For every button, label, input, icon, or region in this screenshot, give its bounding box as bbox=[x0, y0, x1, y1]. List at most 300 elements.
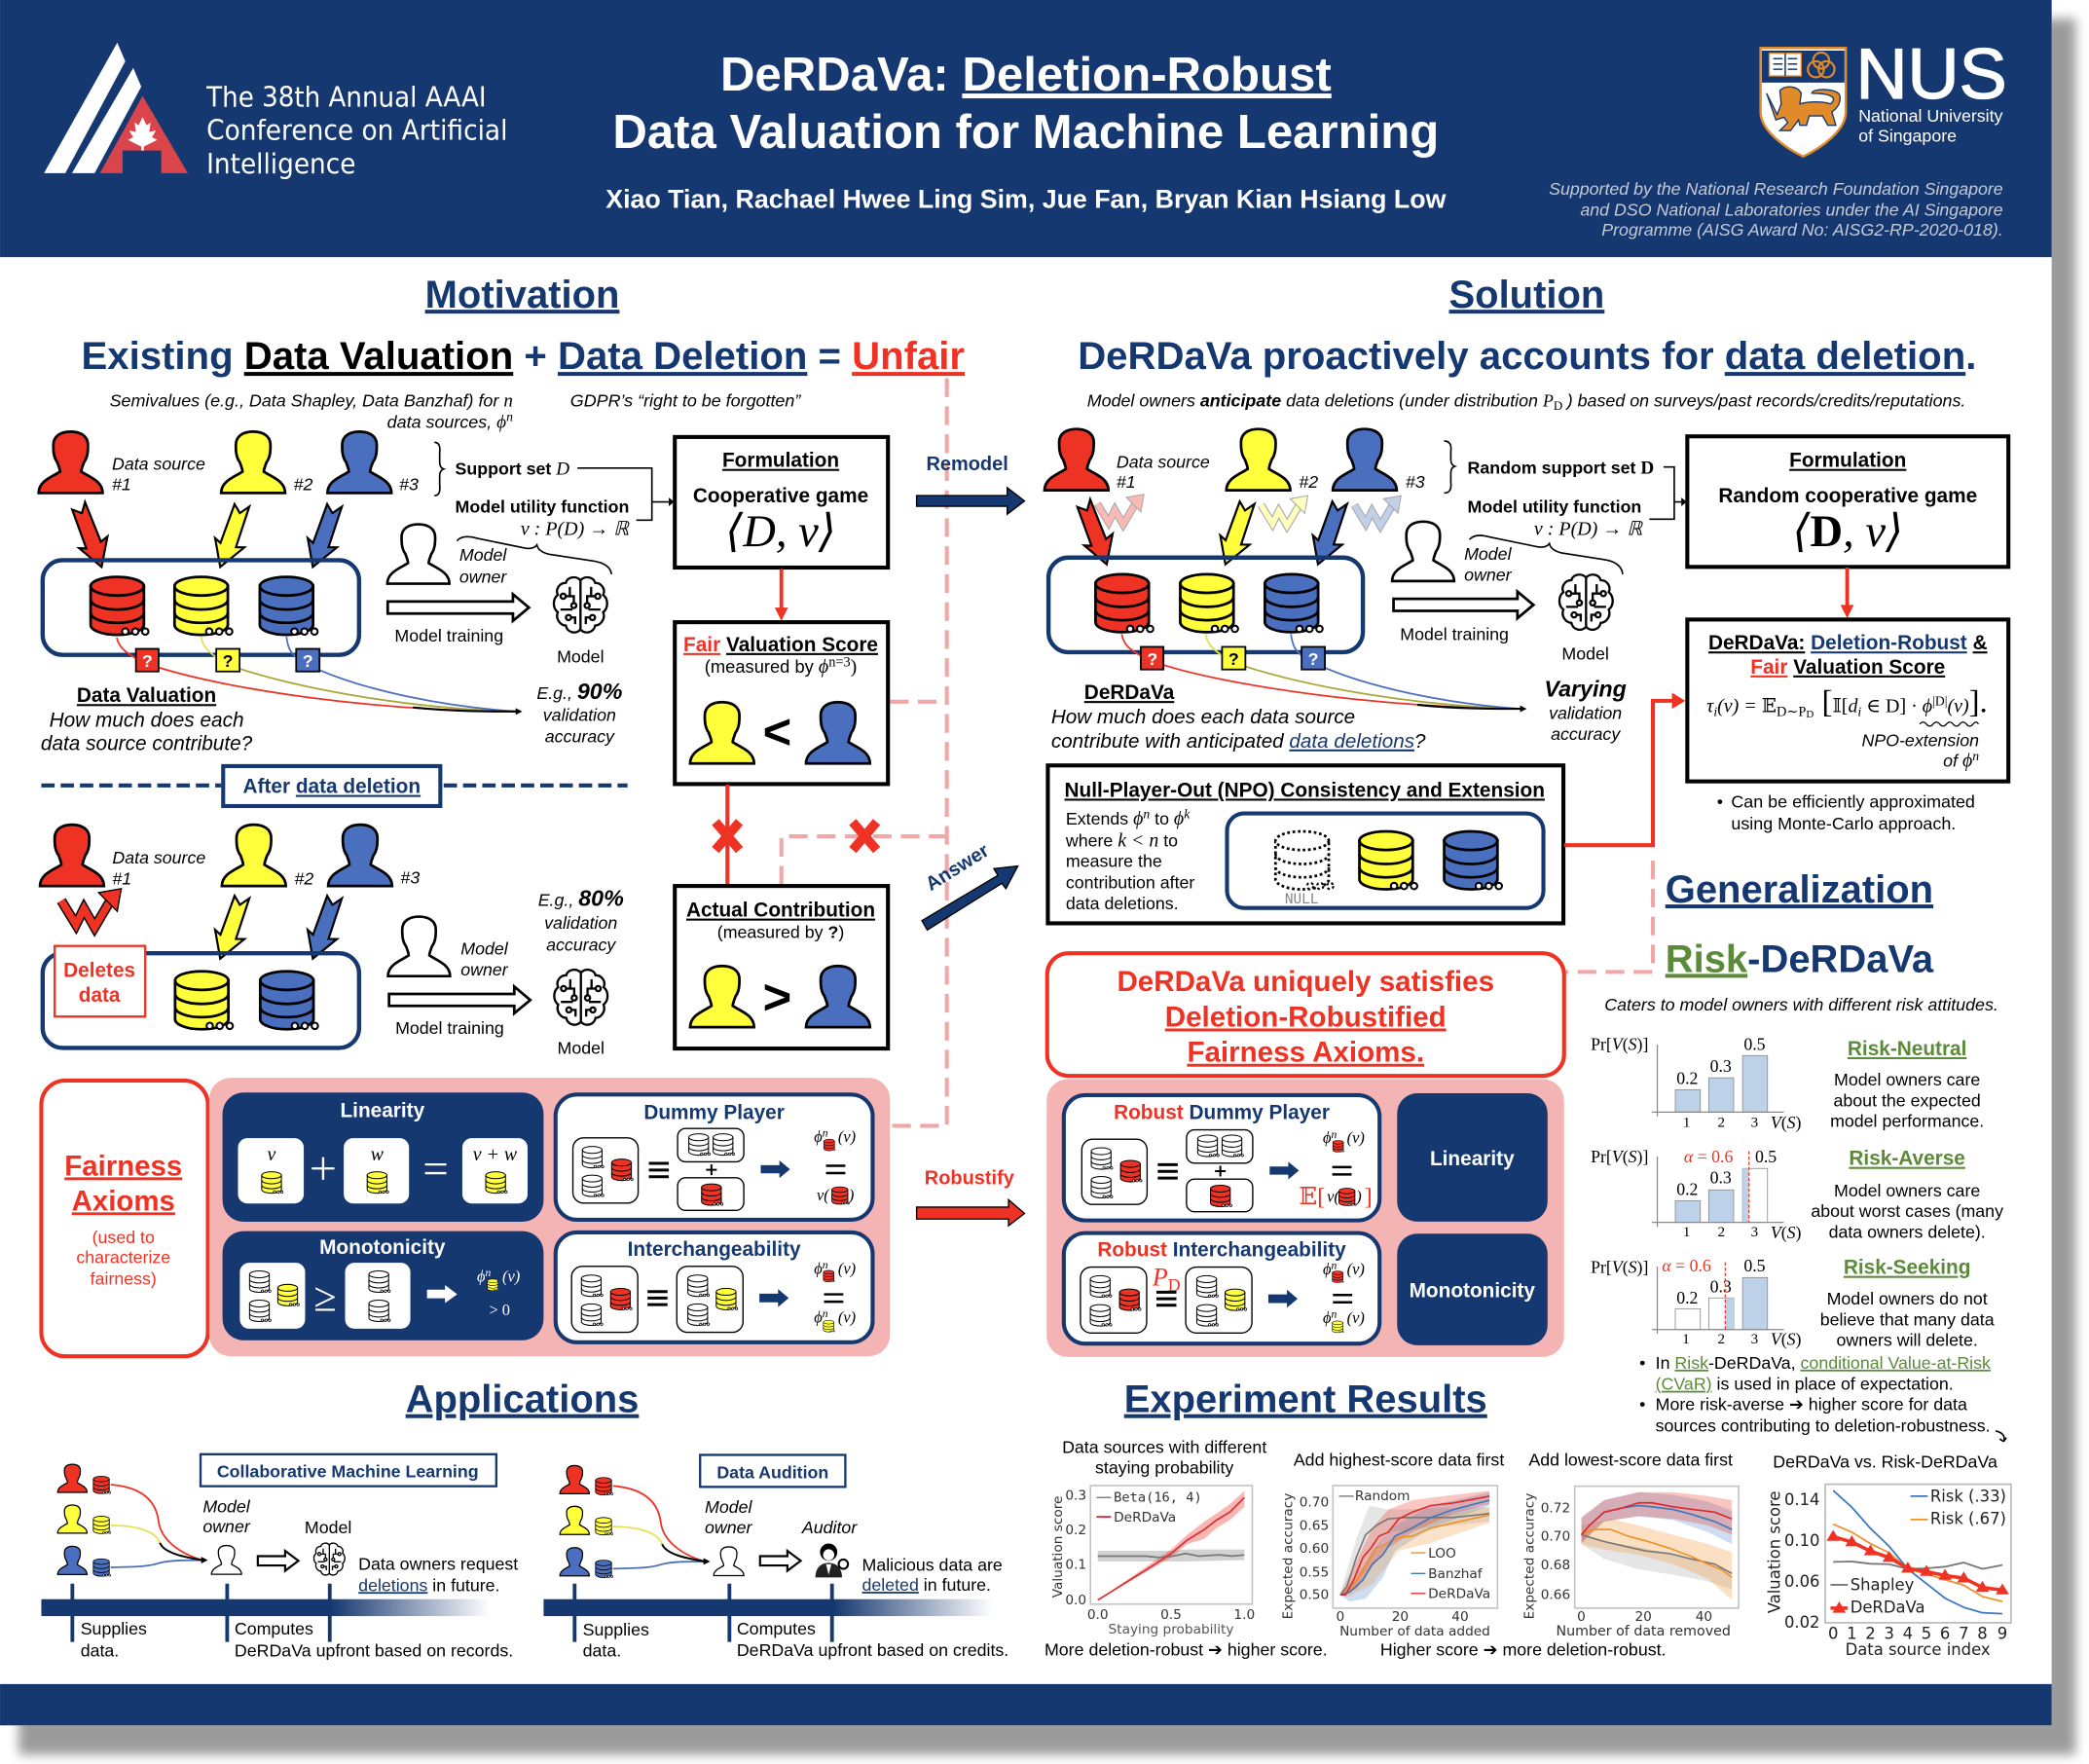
data sources row 2: #2 bbox=[294, 868, 313, 888]
chart: add lowest-score data first: 40 bbox=[1696, 1609, 1712, 1625]
risk-averse text bbox=[1811, 1148, 2003, 1242]
chart: staying probability: Valuation score bbox=[1050, 1496, 1066, 1598]
question badges bbox=[136, 648, 319, 672]
risk-seeking chart: 2 bbox=[1717, 1332, 1725, 1347]
chart: add lowest-score data first: Add lowest-score data first bbox=[1528, 1450, 1733, 1469]
model owner and training solution bbox=[1392, 522, 1623, 663]
model owner and training 2: owner bbox=[460, 960, 509, 979]
robust dummy player bbox=[1064, 1095, 1379, 1221]
red connector NPO to score bbox=[1564, 693, 1685, 845]
DeRDaVa caption: How much does each data source bbox=[1051, 706, 1355, 728]
conference name bbox=[205, 81, 507, 180]
funding note: Programme (AISG Award No: AISG2-RP-2020-018). bbox=[1601, 220, 2003, 239]
robust dummy player: (v) bbox=[1347, 1128, 1365, 1147]
DeRDaVa score box: (v) bbox=[1947, 696, 1969, 717]
application: data audition: DeRDaVa upfront based on credits. bbox=[737, 1640, 1008, 1660]
footer band bbox=[0, 1684, 2052, 1725]
chart: DeRDaVa vs Risk-DeRDaVa: 0.02 bbox=[1784, 1613, 1820, 1632]
chart: DeRDaVa vs Risk-DeRDaVa: 0.10 bbox=[1784, 1531, 1820, 1550]
chart: DeRDaVa vs Risk-DeRDaVa: 0 bbox=[1828, 1624, 1838, 1642]
data valuation caption: Data Valuation bbox=[77, 684, 216, 707]
chart: staying probability: 0.0 bbox=[1087, 1607, 1109, 1623]
brace and set labels: Model utility function bbox=[456, 496, 629, 516]
robust interchangeability: n bbox=[1332, 1260, 1338, 1272]
data sources row 1: #3 bbox=[399, 475, 419, 495]
dummy player axiom: ϕ bbox=[814, 1127, 823, 1146]
application: data audition: Model bbox=[705, 1497, 752, 1517]
withdrawing arrows bbox=[61, 889, 122, 928]
robust dummy player: Robust Dummy Player bbox=[1114, 1102, 1330, 1124]
dashed pink connectors bbox=[782, 379, 1653, 1125]
anticipation note: Model owners anticipate data deletions (under distribution P bbox=[1087, 390, 1554, 410]
arrow: formulation to score bbox=[775, 569, 788, 621]
application: data audition: Auditor bbox=[801, 1518, 858, 1537]
application: collaborative machine learning: Data owners request bbox=[358, 1555, 518, 1574]
risk-seeking chart: 3 bbox=[1751, 1332, 1758, 1347]
risk-averse chart: 0.2 bbox=[1676, 1179, 1698, 1198]
linearity tile bbox=[1397, 1093, 1548, 1222]
fair valuation score box bbox=[675, 622, 888, 784]
chart: DeRDaVa vs Risk-DeRDaVa: Risk (.33) bbox=[1930, 1487, 2006, 1505]
incoming arrows solution bbox=[1070, 496, 1356, 570]
risk-averse text: about worst cases (many bbox=[1811, 1201, 2003, 1221]
data sources solution: #3 bbox=[1406, 472, 1425, 492]
chart: DeRDaVa vs Risk-DeRDaVa: 9 bbox=[1997, 1624, 2007, 1642]
risk-seeking chart: 0.2 bbox=[1676, 1288, 1698, 1307]
DeRDaVa score box: D∼P bbox=[1777, 705, 1806, 720]
risk-seeking text: believe that many data bbox=[1820, 1310, 1995, 1330]
robust dummy player: ] bbox=[1364, 1184, 1373, 1210]
data sources row 1: #2 bbox=[294, 475, 313, 495]
risk-neutral chart: 2 bbox=[1717, 1115, 1725, 1130]
arrow: solution formulation to score bbox=[1841, 568, 1853, 618]
interchangeability axiom: ϕ bbox=[814, 1259, 823, 1277]
GDPR note: GDPR’s “right to be forgotten” bbox=[570, 390, 801, 410]
interchangeability axiom: n bbox=[823, 1307, 828, 1320]
NPO panel: k bbox=[1184, 806, 1191, 821]
chart: DeRDaVa vs Risk-DeRDaVa: Shapley bbox=[1851, 1575, 1915, 1594]
semivalues note: Semivalues (e.g., Data Shapley, Data Banzhaf) for n bbox=[110, 390, 513, 411]
data valuation caption: How much does each bbox=[50, 710, 244, 732]
dummy player axiom: ) bbox=[848, 1186, 854, 1204]
chart: DeRDaVa vs Risk-DeRDaVa: 2 bbox=[1865, 1624, 1876, 1642]
DeRDaVa score box bbox=[1687, 619, 2008, 782]
DeRDaVa score box: DeRDaVa: Deletion-Robust & bbox=[1708, 632, 1988, 654]
chart: add highest-score data first: 0 bbox=[1336, 1609, 1344, 1625]
risk-seeking text: Risk-Seeking bbox=[1844, 1257, 1970, 1279]
NPO panel: data deletions. bbox=[1066, 894, 1179, 913]
data sources row 1: #1 bbox=[112, 475, 131, 495]
robust interchangeability: (v) bbox=[1347, 1308, 1365, 1327]
formulation box solution: Formulation bbox=[1789, 450, 1906, 472]
panel: fairness axioms label: fairness) bbox=[91, 1268, 157, 1288]
chart: staying probability: Staying probability bbox=[1109, 1622, 1233, 1637]
model owner and training solution: owner bbox=[1464, 566, 1513, 585]
application: data audition: deleted in future. bbox=[862, 1575, 991, 1595]
after data deletion banner: After data deletion bbox=[243, 776, 421, 798]
risk-seeking chart: V(S) bbox=[1771, 1330, 1802, 1350]
chart: add highest-score data first: 0.70 bbox=[1300, 1494, 1329, 1510]
chart: add lowest-score data first: 0.66 bbox=[1541, 1587, 1570, 1602]
monotonicity axiom: ϕ bbox=[477, 1268, 485, 1286]
anticipated deletion arrows bbox=[1097, 495, 1401, 526]
formulation box solution: Random cooperative game bbox=[1718, 485, 1977, 507]
accuracy 80: accuracy bbox=[546, 935, 616, 954]
risk-neutral text: Model owners care bbox=[1834, 1070, 1980, 1089]
fair valuation score box: Fair Valuation Score bbox=[683, 634, 878, 656]
formulation box solution bbox=[1687, 436, 2008, 567]
fair valuation score box: n=3 bbox=[828, 654, 851, 670]
chart: staying probability: 0.2 bbox=[1065, 1523, 1086, 1538]
application: data audition: Supplies bbox=[583, 1620, 649, 1639]
funding note bbox=[1549, 179, 2003, 239]
chart: DeRDaVa vs Risk-DeRDaVa: 4 bbox=[1903, 1624, 1913, 1642]
NUS wordmark: National University bbox=[1858, 106, 2003, 126]
contribution curves bbox=[117, 637, 523, 715]
risk-seeking chart: 0.5 bbox=[1743, 1256, 1766, 1275]
interchangeability axiom: ϕ bbox=[814, 1307, 823, 1326]
chart: DeRDaVa vs Risk-DeRDaVa: 7 bbox=[1959, 1624, 1969, 1642]
monotonicity axiom bbox=[223, 1231, 543, 1341]
question badges solution: ? bbox=[1228, 649, 1239, 669]
DeRDaVa score box: i bbox=[1857, 705, 1861, 719]
CVaR bullets: (CVaR) is used in place of expectation. bbox=[1656, 1375, 1954, 1394]
interchangeability axiom: (v) bbox=[838, 1307, 856, 1326]
chart: staying probability: Beta(16, 4) bbox=[1114, 1489, 1202, 1505]
risk-neutral text: Risk-Neutral bbox=[1848, 1038, 1966, 1060]
CVaR bullets: • bbox=[1639, 1395, 1645, 1415]
DeRDaVa score box: (v) = bbox=[1717, 696, 1762, 717]
brace and set labels: v : P(D) → ℝ bbox=[521, 518, 630, 539]
model owner and training: owner bbox=[459, 568, 507, 587]
risk-seeking text: Model owners do not bbox=[1827, 1289, 1988, 1308]
chart: add highest-score data first: 0.65 bbox=[1300, 1519, 1329, 1534]
model owner and training solution: Model training bbox=[1400, 625, 1509, 644]
authors: Xiao Tian, Rachael Hwee Ling Sim, Jue Fan, Bryan Kian Hsiang Low bbox=[605, 184, 1447, 213]
robust dummy player: 𝔼[ bbox=[1299, 1184, 1325, 1210]
DeRDaVa caption: contribute with anticipated data deletions? bbox=[1051, 730, 1426, 753]
incoming arrows row 2 bbox=[206, 891, 350, 964]
remodel arrow bbox=[917, 454, 1024, 514]
risk-neutral chart: 1 bbox=[1683, 1115, 1690, 1130]
chart: add lowest-score data first bbox=[1521, 1450, 1739, 1639]
risk-neutral chart: 0.3 bbox=[1710, 1056, 1732, 1076]
Monte-Carlo note: • bbox=[1717, 791, 1723, 811]
DeRDaVa caption: DeRDaVa bbox=[1084, 681, 1175, 704]
dummy player axiom: n bbox=[823, 1126, 828, 1139]
robust dummy player: v( bbox=[1327, 1187, 1340, 1205]
question badges: ? bbox=[303, 651, 313, 671]
CVaR bullets: More risk-averse ➔ higher score for data bbox=[1656, 1395, 1967, 1415]
linearity axiom bbox=[223, 1092, 543, 1222]
panel: fairness axioms label bbox=[41, 1081, 208, 1356]
NUS shield bbox=[1761, 48, 1846, 157]
Monte-Carlo note: using Monte-Carlo approach. bbox=[1731, 814, 1956, 833]
heading: motivation: Motivation bbox=[425, 274, 619, 316]
chart: add highest-score data first: Number of data added bbox=[1339, 1624, 1490, 1639]
monotonicity tile bbox=[1397, 1233, 1548, 1345]
Monte-Carlo note: Can be efficiently approximated bbox=[1731, 791, 1975, 811]
AAAI logo bbox=[44, 43, 188, 173]
data sources solution: #1 bbox=[1117, 472, 1136, 492]
model owner and training: Model bbox=[557, 647, 605, 667]
chart: add lowest-score data first: 0 bbox=[1577, 1609, 1586, 1625]
risk-averse chart: 2 bbox=[1717, 1225, 1725, 1240]
formulation box bbox=[675, 437, 888, 568]
dummy player axiom: Dummy Player bbox=[643, 1101, 785, 1123]
application: data audition: Malicious data are bbox=[862, 1555, 1003, 1574]
DeRDaVa score box: [ bbox=[1814, 685, 1832, 720]
varying accuracy: Varying bbox=[1544, 676, 1627, 701]
application: data audition: Data Audition bbox=[716, 1462, 828, 1482]
varying accuracy bbox=[1544, 676, 1627, 744]
chart: add highest-score data first: Add highest-score data first bbox=[1294, 1450, 1504, 1469]
chart: staying probability: 0.3 bbox=[1065, 1488, 1086, 1503]
deletes data label: data bbox=[79, 984, 121, 1007]
actual contribution box: > bbox=[763, 969, 791, 1024]
chart: DeRDaVa vs Risk-DeRDaVa: 6 bbox=[1940, 1624, 1950, 1642]
title bbox=[612, 49, 1439, 159]
model owner and training solution: Model bbox=[1561, 643, 1609, 663]
chart: add lowest-score data first: 0.70 bbox=[1541, 1529, 1570, 1545]
varying accuracy: accuracy bbox=[1551, 724, 1621, 744]
chart: staying probability: 0.5 bbox=[1160, 1607, 1182, 1623]
after data deletion banner bbox=[41, 766, 628, 806]
data sources solution: Data source bbox=[1117, 452, 1210, 471]
risk-averse text: Risk-Averse bbox=[1849, 1148, 1965, 1170]
risk-neutral text: about the expected bbox=[1834, 1091, 1981, 1111]
caption: higher score: Higher score ➔ more deletion-robust. bbox=[1380, 1640, 1666, 1660]
formulation box: Formulation bbox=[722, 450, 839, 472]
chart: add lowest-score data first: Number of data removed bbox=[1556, 1624, 1731, 1639]
actual contribution box bbox=[675, 886, 888, 1048]
risk attitudes note: Caters to model owners with different risk attitudes. bbox=[1604, 995, 1998, 1014]
data pool solution bbox=[1048, 558, 1363, 652]
model owner and training: Model bbox=[459, 545, 507, 565]
risk-neutral chart: 0.5 bbox=[1743, 1034, 1766, 1053]
chart: DeRDaVa vs Risk-DeRDaVa: 3 bbox=[1884, 1624, 1894, 1642]
robust interchangeability bbox=[1064, 1233, 1379, 1343]
NPO panel: NULL bbox=[1285, 892, 1318, 907]
panel: fairness axioms label: characterize bbox=[76, 1247, 170, 1267]
NPO panel: contribution after bbox=[1066, 873, 1194, 893]
CVaR bullets bbox=[1639, 1353, 2006, 1442]
chart: DeRDaVa vs Risk-DeRDaVa bbox=[1765, 1452, 2011, 1659]
linearity axiom: v + w bbox=[473, 1144, 518, 1165]
chart: add lowest-score data first: Expected accuracy bbox=[1521, 1493, 1537, 1619]
application: collaborative machine learning: deletions in future. bbox=[358, 1575, 500, 1595]
anticipation note: D bbox=[1554, 398, 1562, 413]
NPO panel: to bbox=[1150, 809, 1174, 828]
chart: DeRDaVa vs Risk-DeRDaVa: Data source index bbox=[1846, 1640, 1991, 1659]
chart: add highest-score data first: 0.55 bbox=[1300, 1564, 1329, 1580]
monotonicity tile: Monotonicity bbox=[1410, 1280, 1535, 1303]
CVaR bullets: sources contributing to deletion-robustness. bbox=[1656, 1415, 1991, 1435]
actual contribution box: (measured by ?) bbox=[717, 922, 844, 941]
model owner and training 2: Model training bbox=[395, 1018, 504, 1038]
answer arrow bbox=[922, 840, 1018, 930]
model owner and training 2: Model bbox=[460, 939, 509, 959]
DeRDaVa score box: i bbox=[1713, 705, 1717, 719]
data sources row 1: Data source bbox=[112, 454, 205, 473]
chart: add highest-score data first: Expected accuracy bbox=[1281, 1493, 1297, 1619]
varying accuracy: validation bbox=[1549, 703, 1622, 722]
heading: applications: Applications bbox=[406, 1378, 639, 1421]
risk-neutral chart bbox=[1591, 1034, 1802, 1133]
NPO panel: ϕ bbox=[1174, 806, 1191, 829]
semivalues note: data sources, ϕ bbox=[387, 412, 506, 432]
brace and set labels: Support set D bbox=[456, 459, 569, 480]
semivalues note bbox=[110, 390, 513, 432]
chart: DeRDaVa vs Risk-DeRDaVa: 0.06 bbox=[1784, 1572, 1820, 1591]
risk-averse chart: 3 bbox=[1751, 1225, 1758, 1240]
conference name: Conference on Artificial bbox=[206, 115, 507, 147]
NPO panel: Extends ϕ bbox=[1066, 808, 1143, 829]
conference name: Intelligence bbox=[206, 148, 355, 180]
panel: uniquely satisfies callout: Fairness Axioms. bbox=[1187, 1037, 1424, 1069]
DeRDaVa score box: NPO-extension bbox=[1861, 730, 1979, 750]
data sources row 2: Data source bbox=[112, 848, 205, 867]
data sources row 2: #1 bbox=[112, 868, 131, 888]
chart: add highest-score data first: 0.50 bbox=[1300, 1588, 1329, 1603]
heading: generalization: Generalization bbox=[1666, 868, 1933, 911]
anticipation note: ) based on surveys/past records/credits/reputations. bbox=[1567, 390, 1965, 410]
risk-averse chart: 0.5 bbox=[1755, 1147, 1777, 1166]
risk-averse chart: 1 bbox=[1683, 1225, 1690, 1240]
data pool panel bbox=[43, 560, 359, 655]
panel: fairness axioms bbox=[209, 1078, 890, 1356]
risk-neutral text: model performance. bbox=[1830, 1112, 1984, 1131]
robust dummy player: ) bbox=[1355, 1187, 1362, 1205]
chart: staying probability: 1.0 bbox=[1233, 1607, 1255, 1623]
question badges solution bbox=[1141, 646, 1325, 670]
risk-neutral chart: 0.2 bbox=[1676, 1068, 1698, 1087]
CVaR bullets: In Risk-DeRDaVa, conditional Value-at-Risk bbox=[1656, 1353, 1991, 1373]
panel: fairness axioms label: Axioms bbox=[72, 1185, 175, 1217]
chart: add highest-score data first: Random bbox=[1355, 1488, 1410, 1504]
chart: staying probability: 0.0 bbox=[1065, 1593, 1086, 1608]
data sources row 2 bbox=[40, 825, 420, 888]
panel: uniquely satisfies callout: Deletion-Robustified bbox=[1165, 1001, 1447, 1033]
heading: solution: Solution bbox=[1449, 274, 1604, 316]
chart: staying probability: 0.1 bbox=[1065, 1558, 1086, 1573]
deletes data label: Deletes bbox=[63, 960, 135, 982]
risk-neutral text bbox=[1830, 1038, 1984, 1131]
question badges solution: ? bbox=[1147, 649, 1157, 669]
robustify arrow: Robustify bbox=[925, 1168, 1014, 1190]
chart: add highest-score data first: 40 bbox=[1451, 1609, 1469, 1625]
DeRDaVa score box: 𝔼 bbox=[1762, 696, 1777, 717]
answer arrow: Answer bbox=[922, 840, 993, 896]
chart: add highest-score data first: 20 bbox=[1392, 1609, 1409, 1625]
data sources solution: #2 bbox=[1299, 472, 1318, 492]
header band bbox=[0, 0, 2052, 257]
risk-neutral chart: V(S) bbox=[1771, 1113, 1802, 1133]
chart: DeRDaVa vs Risk-DeRDaVa: DeRDaVa vs. Risk-DeRDaVa bbox=[1773, 1452, 1997, 1472]
monotonicity axiom: > 0 bbox=[489, 1301, 510, 1319]
chart: add highest-score data first bbox=[1281, 1450, 1504, 1639]
question badges: ? bbox=[223, 651, 233, 671]
chart: add highest-score data first: LOO bbox=[1428, 1546, 1456, 1562]
panel: uniquely satisfies callout: DeRDaVa uniquely satisfies bbox=[1117, 966, 1494, 998]
accuracy 90: validation bbox=[543, 705, 616, 724]
application: data audition: Computes bbox=[737, 1619, 816, 1638]
interchangeability axiom bbox=[556, 1232, 872, 1342]
title: Data Valuation for Machine Learning bbox=[612, 106, 1439, 159]
robust interchangeability: ϕ bbox=[1323, 1308, 1332, 1327]
application: collaborative machine learning: Model bbox=[202, 1496, 251, 1516]
fair valuation score box: (measured by ϕ bbox=[705, 656, 828, 678]
brace and set labels bbox=[434, 442, 675, 539]
linearity axiom: w bbox=[371, 1144, 385, 1165]
model owner and training solution: Model bbox=[1464, 544, 1513, 564]
monotonicity axiom: (v) bbox=[502, 1268, 520, 1286]
heading: unfair equation: Existing Data Valuation + Data Deletion = Unfair bbox=[82, 334, 965, 378]
formulation box: ⟨D, v⟩ bbox=[725, 507, 836, 557]
chart: staying probability: staying probability bbox=[1095, 1457, 1233, 1477]
chart: add highest-score data first: DeRDaVa bbox=[1428, 1587, 1490, 1602]
chart: DeRDaVa vs Risk-DeRDaVa: 8 bbox=[1977, 1624, 1988, 1642]
model owner and training bbox=[387, 525, 611, 667]
question badges: ? bbox=[142, 651, 153, 671]
Monte-Carlo note bbox=[1717, 791, 1975, 833]
application: data audition bbox=[543, 1454, 1008, 1661]
chart: staying probability: Data sources with different bbox=[1062, 1438, 1266, 1457]
model owner and training: Model training bbox=[394, 626, 503, 645]
risk-averse chart: α = 0.6 bbox=[1684, 1147, 1734, 1166]
remodel arrow: Remodel bbox=[926, 454, 1008, 475]
monotonicity axiom: n bbox=[485, 1267, 491, 1279]
robust dummy player: n bbox=[1332, 1128, 1338, 1141]
risk-seeking chart bbox=[1591, 1256, 1802, 1350]
incoming arrows row 1 bbox=[65, 498, 350, 572]
risk-neutral chart: 3 bbox=[1751, 1115, 1758, 1130]
DeRDaVa score box: D bbox=[1806, 709, 1814, 720]
brace and random set labels: Model utility function bbox=[1468, 496, 1641, 516]
panel: fairness axioms label: Fairness bbox=[64, 1150, 182, 1182]
heading: experiment results: Experiment Results bbox=[1124, 1378, 1487, 1421]
chart: add lowest-score data first: 20 bbox=[1634, 1609, 1652, 1625]
data valuation caption: data source contribute? bbox=[41, 733, 253, 755]
dummy player axiom bbox=[556, 1094, 872, 1220]
monotonicity axiom: Monotonicity bbox=[319, 1236, 446, 1259]
DeRDaVa score box: ]. bbox=[1969, 685, 1988, 720]
brace and random set labels bbox=[1445, 441, 1687, 539]
fair valuation score box: < bbox=[763, 704, 791, 759]
accuracy 90: E.g., 90% bbox=[536, 679, 623, 704]
semivalues note: n bbox=[506, 409, 513, 423]
fair valuation score box: ) bbox=[851, 656, 857, 678]
linearity tile: Linearity bbox=[1430, 1148, 1515, 1170]
actual contribution box: Actual Contribution bbox=[686, 900, 875, 922]
DeRDaVa score box: Fair Valuation Score bbox=[1750, 656, 1945, 679]
chart: staying probability bbox=[1050, 1438, 1266, 1637]
chart: DeRDaVa vs Risk-DeRDaVa: Risk (.67) bbox=[1930, 1510, 2006, 1528]
panel: robust axioms bbox=[1046, 1080, 1564, 1357]
risk-seeking chart: α = 0.6 bbox=[1662, 1256, 1711, 1275]
NPO panel: n bbox=[1143, 806, 1150, 821]
robust interchangeability: n bbox=[1332, 1308, 1338, 1321]
robustify arrow bbox=[917, 1168, 1024, 1226]
risk-averse chart: Pr[V(S)] bbox=[1591, 1147, 1648, 1167]
interchangeability axiom: Interchangeability bbox=[628, 1238, 801, 1261]
DeRDaVa score box: |D| bbox=[1932, 694, 1947, 709]
application: collaborative machine learning: Collaborative Machine Learning bbox=[217, 1461, 479, 1481]
dummy player axiom: (v) bbox=[838, 1127, 856, 1146]
DeRDaVa caption bbox=[1051, 681, 1426, 753]
application: collaborative machine learning: data. bbox=[81, 1641, 119, 1661]
model owner and training 2 bbox=[388, 917, 607, 1058]
